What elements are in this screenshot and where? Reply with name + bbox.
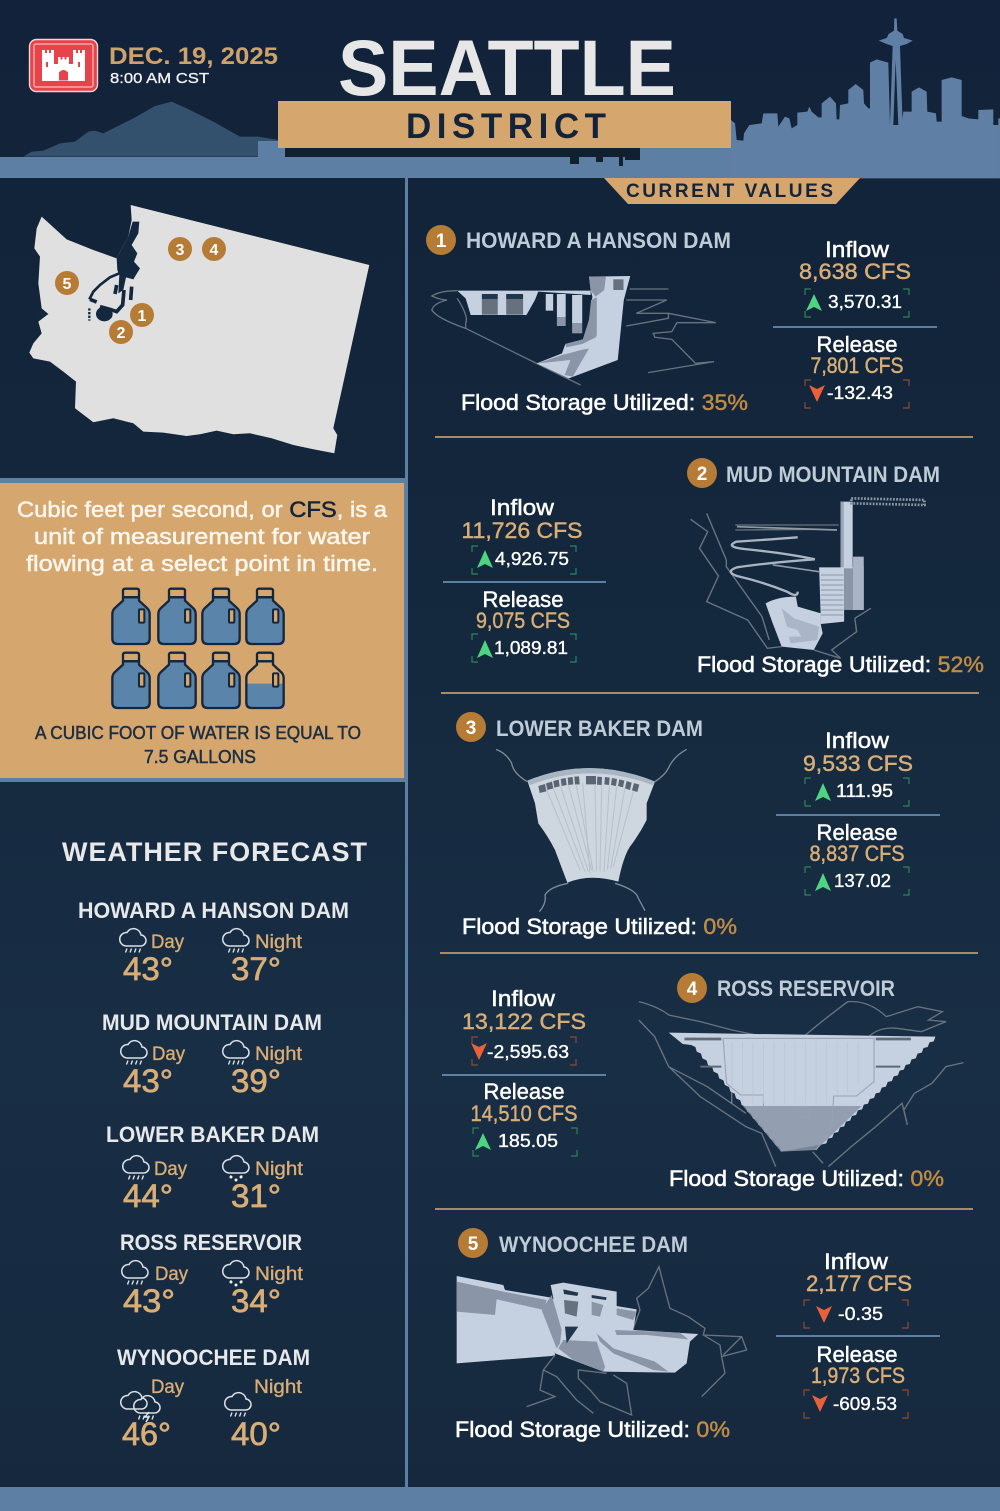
forecast: Lower Baker Dam: Day	[154, 1159, 187, 1180]
forecast: Lower Baker Dam: 44°	[123, 1178, 173, 1214]
logo: castle	[30, 40, 98, 92]
release values: Release	[484, 1079, 564, 1104]
forecast: Wynoochee Dam: Day	[151, 1377, 184, 1398]
panel: weather forecast	[62, 837, 368, 1452]
skyline silhouette	[731, 18, 1000, 178]
gallon caption: 7.5 GALLONS	[144, 747, 256, 767]
inflow values: 13,122 CFS	[462, 1009, 586, 1034]
release values: 137.02	[834, 871, 891, 891]
badge 4	[677, 973, 707, 1003]
header: mountain and skyline	[0, 18, 1000, 178]
flood storage: Flood Storage Utilized: 0%	[462, 914, 737, 939]
panel: CFS explainer	[0, 478, 405, 782]
inflow values: 4,926.75	[495, 549, 569, 569]
tab: current values: CURRENT VALUES	[626, 181, 833, 202]
inflow values	[462, 495, 582, 574]
release values	[805, 332, 909, 408]
forecast: Mud Mountain Dam: 39°	[231, 1063, 281, 1099]
forecast: Howard A Hanson Dam: Day	[151, 932, 184, 953]
forecast: Howard A Hanson Dam: Night	[255, 932, 303, 953]
release values: 1,089.81	[494, 638, 568, 658]
heading: weather forecast: WEATHER FORECAST	[62, 837, 368, 867]
forecast: Lower Baker Dam: 31°	[231, 1178, 281, 1214]
mountain silhouette	[23, 102, 278, 157]
dam name: ROSS RESERVOIR	[717, 976, 895, 1001]
forecast: Wynoochee Dam: Night	[254, 1377, 303, 1398]
dam name: LOWER BAKER DAM	[496, 716, 703, 741]
icon: eight gallon jugs	[112, 589, 284, 708]
release values: -609.53	[833, 1394, 897, 1414]
forecast: Mud Mountain Dam: Night	[255, 1044, 303, 1065]
forecast: Wynoochee Dam: 40°	[231, 1416, 281, 1452]
release values	[470, 1079, 578, 1156]
badge 3	[456, 712, 486, 742]
inflow values: -2,595.63	[487, 1042, 569, 1062]
title: Seattle: SEATTLE	[338, 23, 676, 112]
badge 1	[426, 225, 456, 255]
forecast: Wynoochee Dam	[117, 1345, 310, 1452]
gallon caption	[35, 723, 361, 767]
forecast: Lower Baker Dam	[106, 1122, 319, 1214]
forecast: Howard A Hanson Dam: 43°	[123, 951, 173, 987]
forecast: Howard A Hanson Dam	[78, 898, 349, 987]
marker 5	[55, 271, 79, 295]
explainer text: flowing at a select point in time.	[26, 551, 378, 576]
release values: 7,801 CFS	[810, 353, 904, 378]
inflow values: Inflow	[824, 1249, 888, 1274]
inflow values	[803, 728, 913, 806]
forecast: Wynoochee Dam: 46°	[122, 1416, 171, 1452]
flood storage: Flood Storage Utilized: 0%	[455, 1417, 730, 1442]
release values: 14,510 CFS	[470, 1101, 578, 1126]
inflow values: Inflow	[491, 986, 555, 1011]
panel: Washington map	[29, 205, 369, 453]
badge 1: 1	[436, 231, 447, 252]
release values: Release	[816, 332, 898, 357]
under-bar cutouts	[285, 148, 640, 166]
marker 1	[130, 303, 154, 327]
marker 5: 5	[63, 276, 72, 293]
inflow values: 8,638 CFS	[799, 259, 911, 284]
release values: Release	[816, 820, 898, 845]
date: DEC. 19, 2025	[109, 43, 278, 70]
forecast: Mud Mountain Dam: 43°	[123, 1063, 173, 1099]
dam name: HOWARD A HANSON DAM	[466, 228, 731, 253]
release values	[805, 820, 909, 895]
marker 1: 1	[138, 308, 147, 325]
dam illustration	[639, 1002, 964, 1167]
forecast: Mud Mountain Dam	[102, 1010, 322, 1099]
forecast: Wynoochee Dam: WYNOOCHEE DAM	[117, 1345, 310, 1370]
marker 4: 4	[210, 242, 219, 259]
explainer text: unit of measurement for water	[34, 524, 370, 549]
inflow values	[799, 237, 911, 317]
forecast: Howard A Hanson Dam: HOWARD A HANSON DAM	[78, 898, 349, 923]
marker 3	[168, 237, 192, 261]
state outline	[29, 205, 369, 453]
inflow values: 2,177 CFS	[806, 1271, 912, 1296]
badge 2: 2	[697, 464, 707, 485]
panel: dam 3 Lower Baker	[456, 712, 940, 939]
panel: dam 1 Howard A Hanson	[426, 225, 937, 415]
inflow values: 3,570.31	[828, 292, 902, 312]
release values	[804, 1342, 908, 1418]
marker 3: 3	[176, 242, 185, 259]
forecast: Mud Mountain Dam: MUD MOUNTAIN DAM	[102, 1010, 322, 1035]
title bar: District: DISTRICT	[406, 107, 606, 146]
release values: 8,837 CFS	[810, 841, 904, 866]
tab: current values	[604, 178, 860, 204]
release values: -132.43	[827, 383, 893, 403]
release values	[472, 587, 576, 662]
badge 4: 4	[687, 979, 698, 1000]
inflow values: 111.95	[836, 781, 893, 801]
dam illustration	[691, 498, 924, 658]
forecast: Ross Reservoir: ROSS RESERVOIR	[120, 1230, 302, 1255]
title bar: District	[278, 101, 731, 148]
flood storage: Flood Storage Utilized: 35%	[461, 390, 748, 415]
release values: Release	[816, 1342, 898, 1367]
forecast: Howard A Hanson Dam: 37°	[231, 951, 281, 987]
forecast: Ross Reservoir: Night	[255, 1264, 304, 1285]
dam name: WYNOOCHEE DAM	[499, 1232, 688, 1257]
dam name: MUD MOUNTAIN DAM	[726, 462, 940, 487]
explainer text: Cubic feet per second, or CFS, is a	[17, 497, 388, 522]
marker 2: 2	[117, 325, 126, 342]
inflow values: Inflow	[825, 237, 889, 262]
inflow values	[462, 986, 586, 1065]
forecast: Lower Baker Dam: LOWER BAKER DAM	[106, 1122, 319, 1147]
forecast: Ross Reservoir: Day	[155, 1264, 188, 1285]
forecast: Ross Reservoir	[120, 1230, 304, 1319]
marker 4	[202, 237, 226, 261]
panel: dam 5 Wynoochee	[455, 1228, 940, 1442]
panel: dam 2 Mud Mountain	[443, 458, 984, 677]
panel: dam 4 Ross Reservoir	[442, 973, 964, 1191]
marker 2	[109, 320, 133, 344]
badge 3: 3	[466, 718, 476, 739]
release values: 1,973 CFS	[811, 1363, 905, 1388]
forecast: Lower Baker Dam: Night	[255, 1159, 304, 1180]
release values: 9,075 CFS	[476, 608, 570, 633]
badge 2	[687, 458, 717, 488]
badge 5: 5	[468, 1234, 479, 1255]
inflow values: -0.35	[838, 1304, 883, 1324]
inflow values: Inflow	[490, 495, 554, 520]
flood storage: Flood Storage Utilized: 52%	[697, 652, 984, 677]
badge 5	[458, 1228, 488, 1258]
inflow values: 11,726 CFS	[462, 518, 582, 543]
forecast: Ross Reservoir: 43°	[123, 1283, 175, 1319]
dam illustration	[496, 749, 687, 912]
inflow values: Inflow	[825, 728, 889, 753]
dam illustration	[457, 1267, 747, 1415]
forecast: Ross Reservoir: 34°	[231, 1283, 281, 1319]
release values: 185.05	[498, 1131, 558, 1151]
explainer text	[17, 497, 388, 576]
forecast: Mud Mountain Dam: Day	[152, 1044, 185, 1065]
dam illustration	[432, 276, 716, 385]
flood storage: Flood Storage Utilized: 0%	[669, 1166, 944, 1191]
inflow values: 9,533 CFS	[803, 751, 913, 776]
ground band	[0, 141, 735, 178]
inflow values	[804, 1249, 912, 1328]
time: 8:00 AM CST	[110, 70, 209, 87]
release values: Release	[482, 587, 564, 612]
gallon caption: A CUBIC FOOT OF WATER IS EQUAL TO	[35, 723, 361, 743]
